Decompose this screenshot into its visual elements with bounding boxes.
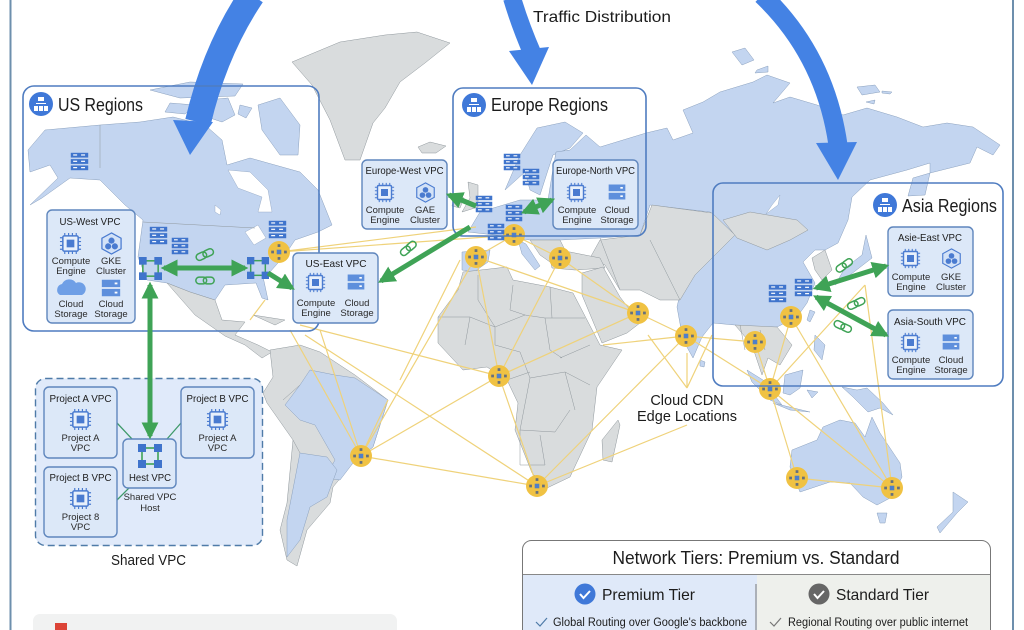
- map: Korea: [812, 250, 832, 280]
- panel: US-West VPC: [47, 210, 135, 323]
- blue traffic arrow to Europe: [509, 0, 549, 85]
- panel: Europe-West VPC: Compute: [366, 205, 404, 216]
- map: Central Asia: [590, 205, 735, 300]
- Shared VPC host caption: [124, 492, 177, 514]
- Cloud CDN label: Edge Locations: [637, 409, 737, 425]
- panel: Asia-East VPC: Cluster: [936, 282, 966, 293]
- Project B VPC lower: Project B VPC: [50, 472, 112, 484]
- panel: Europe-West VPC: Cluster: [410, 215, 440, 226]
- map: Hudson Bay and Great Lakes: [215, 170, 272, 245]
- server icons: [71, 153, 812, 302]
- map: Indochina: [735, 325, 792, 375]
- Standard tier heading: Standard Tier: [836, 587, 930, 604]
- icon: Europe regions: [462, 93, 486, 117]
- map: Turkey: [548, 250, 605, 270]
- Cloud CDN connection lines: [250, 227, 892, 488]
- network hub icons: [139, 257, 269, 280]
- panel: Asia Regions: [713, 183, 1003, 386]
- panel: US-East VPC: [293, 253, 378, 323]
- panel: US-West VPC: Cloud: [99, 299, 123, 310]
- panel: Asia-South VPC: Cloud: [939, 355, 963, 366]
- map: Arabia: [582, 267, 640, 343]
- heading: Asia Regions: Asia Regions: [902, 195, 997, 216]
- panel: US-East VPC: Storage: [340, 308, 374, 319]
- Project B VPC right: VPC: [208, 443, 227, 454]
- panel: Shared VPC: [36, 378, 262, 546]
- panel: Asia-East VPC: GKE: [941, 272, 961, 283]
- Standard tier heading: [808, 584, 930, 604]
- map: Africa: [438, 267, 622, 488]
- blue traffic arrow to US: [173, 0, 252, 155]
- panel: Europe-West VPC: GAE: [415, 205, 435, 216]
- Host VPC: [123, 439, 176, 488]
- map: Madagascar: [602, 420, 620, 462]
- Premium tier background: [523, 575, 757, 630]
- panel: US-East VPC: Engine: [301, 308, 331, 319]
- panel: Asia-East VPC: Compute: [892, 272, 930, 283]
- heading: US Regions: US Regions: [58, 94, 143, 115]
- panel: US-West VPC: GKE: [101, 256, 121, 267]
- map: Mexico and Central America: [167, 283, 285, 358]
- Premium tier heading: [574, 584, 696, 604]
- panel: Asia-South VPC: Compute: [892, 355, 930, 366]
- panel: US-West VPC: Storage: [54, 309, 88, 320]
- Project A VPC: Project A VPC: [50, 393, 112, 405]
- map: North America: [28, 117, 332, 300]
- Shared VPC host caption: Shared VPC: [124, 492, 177, 503]
- panel: Europe-North VPC: Europe-North VPC: [556, 165, 635, 177]
- panel: Asia-East VPC: [888, 227, 973, 296]
- map: Balkans: [530, 240, 566, 262]
- map: Philippines and Taiwan: [807, 310, 825, 360]
- panel: Asia-East VPC: Asie-East VPC: [898, 232, 962, 244]
- panel: Europe-North VPC: Storage: [600, 215, 634, 226]
- icon: cloud: [57, 279, 86, 295]
- Shared VPC host caption: Host: [140, 503, 160, 514]
- panel: US-East VPC: Compute: [297, 298, 335, 309]
- heading: Europe Regions: Europe Regions: [491, 94, 608, 115]
- Project A VPC: [44, 387, 117, 458]
- panel: US-West VPC: Engine: [56, 266, 86, 277]
- map: Scandinavia: [505, 122, 583, 195]
- panel: Europe-West VPC: Engine: [370, 215, 400, 226]
- map: Japan and Sakhalin: [835, 173, 930, 285]
- blue traffic arrow to Asia: [762, 0, 857, 180]
- panel: Asia-East VPC: Engine: [896, 282, 926, 293]
- heading: Network Tiers: Network Tiers: Premium vs. Standard: [612, 548, 900, 568]
- map: Arctic islands near Siberia: [732, 48, 892, 104]
- map: Mongolia: [723, 212, 808, 250]
- Cloud CDN label: Cloud CDN: [650, 393, 724, 409]
- Project B VPC right: [181, 387, 254, 458]
- icon: US regions: [29, 92, 53, 116]
- map: Brazil: [285, 370, 388, 480]
- map: Sri Lanka: [700, 360, 705, 367]
- panel: US-East VPC: US-East VPC: [306, 258, 367, 270]
- map: Canadian Arctic islands: [150, 82, 300, 155]
- panel: Europe-West VPC: Europe-West VPC: [366, 165, 444, 177]
- Premium tier feature: Global Routing over Google's backbone: [553, 617, 747, 629]
- panel: Europe-West VPC: [362, 160, 447, 229]
- Project B VPC lower: VPC: [71, 522, 90, 533]
- panel: Asia-South VPC: Storage: [934, 365, 968, 376]
- link icons: [195, 240, 866, 333]
- traffic distribution label: Traffic Distribution: [533, 9, 671, 26]
- panel: US-West VPC: Cluster: [96, 266, 126, 277]
- map: Spain: [462, 250, 490, 272]
- map: country borders: [100, 125, 765, 465]
- Project A VPC: Project A: [61, 433, 100, 444]
- map: Italy: [518, 240, 540, 270]
- panel: US-West VPC: US-West VPC: [60, 216, 121, 228]
- panel: Europe-North VPC: Engine: [562, 215, 592, 226]
- CDN edge node icons: [268, 224, 903, 499]
- green peering arrows: [150, 195, 886, 436]
- map: Iceland: [418, 142, 446, 153]
- panel: US-West VPC: Compute: [52, 256, 90, 267]
- Project B VPC right: Project B VPC: [186, 393, 249, 405]
- map: Lake Baikal: [766, 195, 780, 214]
- Project B VPC lower: Project 8: [62, 512, 99, 523]
- panel: bottom-left note: [33, 614, 397, 630]
- map: Britain and Ireland: [452, 182, 478, 212]
- panel: US-West VPC: Storage: [94, 309, 128, 320]
- panel: US-West VPC: Cloud: [59, 299, 83, 310]
- map: Tasmania and New Zealand: [877, 492, 968, 533]
- panel: Asia-South VPC: Engine: [896, 365, 926, 376]
- Host VPC: Hest VPC: [129, 472, 171, 484]
- icon: Asia regions: [873, 193, 897, 217]
- Premium tier heading: Premium Tier: [602, 587, 696, 604]
- panel: US Regions: [23, 86, 319, 331]
- panel: Europe-North VPC: Compute: [558, 205, 596, 216]
- map: Indonesia and New Guinea: [747, 370, 893, 415]
- map: Australia: [790, 417, 902, 505]
- Standard tier feature: Regional Routing over public internet: [788, 617, 969, 629]
- panel: Europe Regions: [453, 88, 646, 236]
- Project B VPC right: Project A: [198, 433, 237, 444]
- panel: Asia-South VPC: [888, 310, 973, 379]
- Project B VPC lower: [44, 467, 117, 537]
- map: Greenland: [292, 32, 450, 160]
- heading: Shared VPC: Shared VPC: [111, 553, 186, 569]
- Cloud CDN label: [637, 393, 737, 425]
- map: South America: [263, 345, 388, 566]
- map: Europe and Russia: [468, 75, 1000, 358]
- map: Argentina: [287, 453, 337, 557]
- panel: US-East VPC: Cloud: [345, 298, 369, 309]
- panel: Asia-South VPC: Asia-South VPC: [894, 316, 966, 328]
- panel: Network Tiers: [522, 540, 990, 630]
- Standard tier background: [757, 575, 990, 630]
- Project A VPC: VPC: [71, 443, 90, 454]
- panel: Europe-North VPC: [553, 160, 638, 229]
- panel: Europe-North VPC: Cloud: [605, 205, 629, 216]
